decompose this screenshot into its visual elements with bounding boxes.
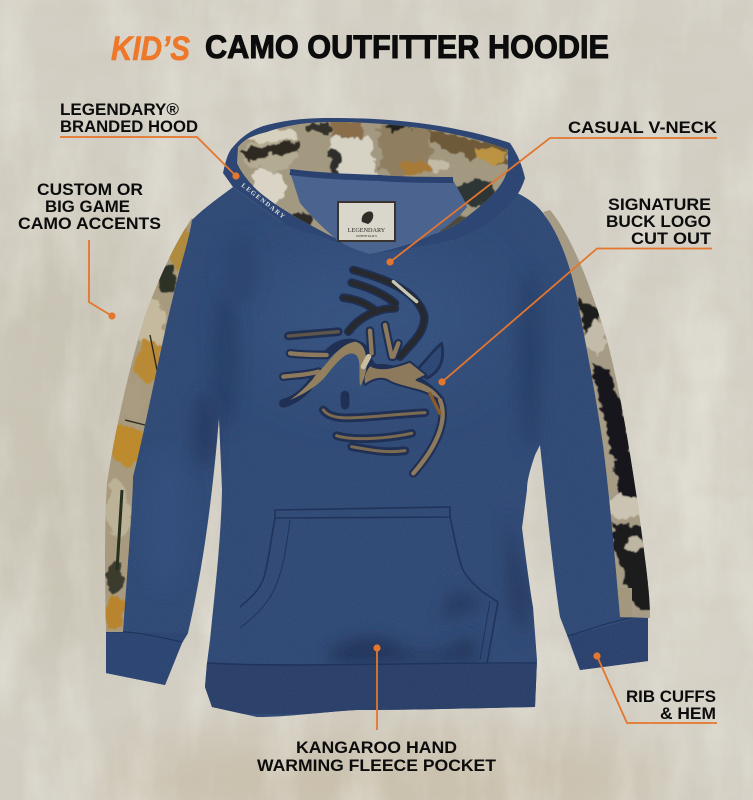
right sleeve camo accent <box>543 210 650 618</box>
callout: custom or big game camo accents: CAMO ACCENTS <box>18 215 161 233</box>
callout: casual v-neck: CASUAL V-NECK <box>568 119 717 137</box>
hood outer <box>223 118 525 253</box>
callout: kangaroo hand warming fleece pocket: WARMING FLEECE POCKET <box>257 757 496 775</box>
title: CAMO OUTFITTER HOODIE <box>205 29 609 65</box>
callout: signature buck logo cut out: BUCK LOGO <box>606 213 711 231</box>
callout: custom or big game camo accents: BIG GAME <box>45 198 130 216</box>
callout: legendary branded hood <box>60 101 240 180</box>
logo head fill <box>364 362 444 403</box>
hood camo lining <box>237 122 508 238</box>
logo camo fill <box>283 325 443 473</box>
left sleeve camo accent <box>105 218 193 632</box>
sweatshirt body, sleeves, cuffs and hem <box>90 180 670 730</box>
callout: rib cuffs and hem: & HEM <box>660 705 716 723</box>
buck logo cut out <box>283 270 444 473</box>
callout: legendary branded hood: BRANDED HOOD <box>60 118 198 136</box>
callout: kangaroo hand warming fleece pocket: KANGAROO HAND <box>296 739 457 757</box>
callout: casual v-neck <box>386 119 717 266</box>
callout: rib cuffs and hem: RIB CUFFS <box>626 688 716 706</box>
title: KID’S <box>111 30 190 68</box>
callout: custom or big game camo accents <box>18 181 161 320</box>
neck label <box>338 202 395 241</box>
neck binding <box>290 172 453 180</box>
callout: signature buck logo cut out <box>438 196 712 386</box>
logo dark outline <box>283 270 443 473</box>
callout: signature buck logo cut out: SIGNATURE <box>608 196 711 214</box>
callout: signature buck logo cut out: CUT OUT <box>631 230 711 248</box>
callout: rib cuffs and hem <box>593 652 717 723</box>
hood branding text: LEGENDARY <box>240 182 286 220</box>
neck label: WHITETAILS <box>356 234 377 238</box>
callout: custom or big game camo accents: CUSTOM OR <box>37 181 143 199</box>
logo lower antler fill <box>290 342 367 400</box>
callout: legendary branded hood: LEGENDARY® <box>60 101 179 119</box>
neck label: LEGENDARY <box>348 227 386 234</box>
kangaroo pocket <box>240 507 498 663</box>
callout: kangaroo hand warming fleece pocket <box>257 644 496 775</box>
inner neck fleece <box>290 172 467 254</box>
hoodie illustration <box>90 115 670 730</box>
logo ear <box>417 343 443 378</box>
